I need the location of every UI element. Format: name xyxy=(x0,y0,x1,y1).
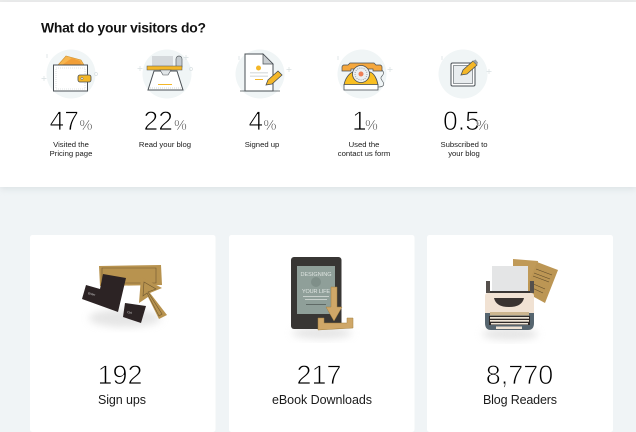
stat: 1% used the contact us form: % xyxy=(365,118,378,134)
stat: 47% visited the pricing page: Pricing page xyxy=(50,149,92,158)
label: sign ups: Sign ups xyxy=(98,393,146,407)
stat: 4% signed up: % xyxy=(264,118,276,134)
stat: 4% signed up xyxy=(245,106,279,149)
heading: What do your visitors do? xyxy=(41,20,206,36)
stat: 1% used the contact us form: contact us form xyxy=(338,149,390,158)
image: e-reader with cardboard download arrow: DESIGNING xyxy=(300,272,332,278)
icon: telephone xyxy=(337,50,392,98)
value: 8,770: 8,770 xyxy=(486,360,553,390)
stat: 0.5% subscribed to your blog: % xyxy=(476,118,489,134)
stat: 47% visited the pricing page: 47 xyxy=(50,106,79,136)
stat: 4% signed up: 4 xyxy=(248,106,263,136)
panel: blog readers xyxy=(427,235,613,432)
icon: edit square xyxy=(438,50,492,98)
image: vintage typewriter with cardboard pages xyxy=(482,259,558,340)
image: keyboard keys and cardboard cursor xyxy=(82,265,167,327)
stat: 0.5% subscribed to your blog: Subscribed to xyxy=(440,140,488,149)
label: ebook downloads: eBook Downloads xyxy=(272,393,372,407)
stat: 0.5% subscribed to your blog: your blog xyxy=(448,149,480,158)
stat: 47% visited the pricing page xyxy=(50,106,92,158)
stat: 47% visited the pricing page: % xyxy=(80,118,92,134)
stat: 1% used the contact us form: Used the xyxy=(349,140,379,149)
icon: typewriter xyxy=(138,50,192,98)
icon: wallet xyxy=(42,50,98,98)
panel: sign ups xyxy=(30,235,216,432)
label: blog readers: Blog Readers xyxy=(483,393,557,407)
panel: what do your visitors do xyxy=(0,2,636,187)
stat: 47% visited the pricing page: Visited the xyxy=(53,140,89,149)
stat: 22% read your blog: Read your blog xyxy=(139,140,191,149)
stat: 4% signed up: Signed up xyxy=(245,140,279,149)
stat: 0.5% subscribed to your blog: 0.5 xyxy=(443,106,480,136)
image: keyboard keys and cardboard cursor: Enter xyxy=(88,291,96,297)
stat: 1% used the contact us form xyxy=(338,106,390,158)
stat: 22% read your blog xyxy=(139,106,191,149)
stat: 0.5% subscribed to your blog xyxy=(440,106,489,158)
stat: 1% used the contact us form: 1 xyxy=(352,106,367,136)
stat: 22% read your blog: 22 xyxy=(144,106,173,136)
panel: ebook downloads xyxy=(229,235,414,432)
stat: 22% read your blog: % xyxy=(174,118,187,134)
icon: document and pencil xyxy=(236,50,292,98)
value: 192: 192 xyxy=(97,360,143,390)
image: e-reader with cardboard download arrow: YOUR LIFE xyxy=(302,289,330,295)
value: 217: 217 xyxy=(296,360,342,390)
image: e-reader with cardboard download arrow xyxy=(291,257,353,339)
image: keyboard keys and cardboard cursor: Ctrl xyxy=(127,310,133,315)
